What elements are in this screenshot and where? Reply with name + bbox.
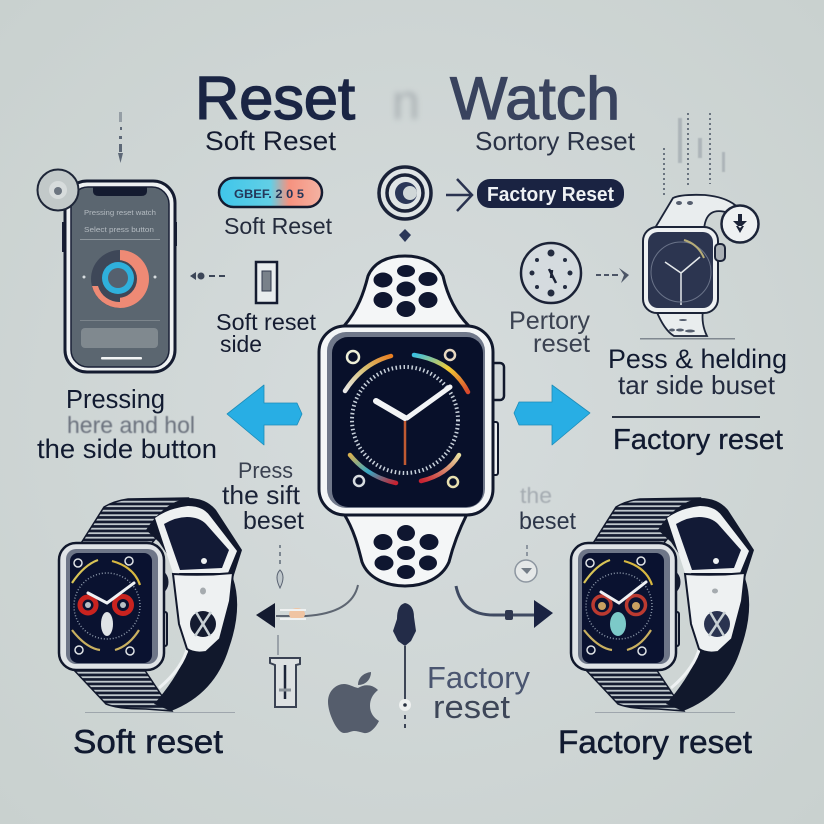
- label: the beset: beset: [519, 508, 576, 535]
- small watch: [643, 195, 735, 336]
- center watch case: [319, 326, 493, 515]
- center watch colored arcs: [345, 355, 468, 483]
- title: n: [392, 74, 420, 130]
- small watch case: [643, 227, 718, 313]
- dashed arrow: clock to watch: [596, 268, 629, 283]
- subtitle: factory reset: Sortory Reset: [475, 126, 636, 156]
- center oval: [101, 612, 113, 636]
- phone screen text: Select press button: [84, 227, 154, 234]
- strap outer: [146, 498, 242, 711]
- bottom right watch: [571, 498, 754, 711]
- case: [571, 543, 676, 670]
- strap dark window: [676, 517, 741, 570]
- apple logo: [328, 672, 379, 733]
- soft reset pill: [219, 178, 322, 207]
- label: press the sift beset: [222, 458, 304, 535]
- label: press and holding: tar side buset: [618, 370, 776, 400]
- screen: [70, 553, 152, 663]
- arcs: [584, 560, 652, 650]
- label: the beset: [519, 483, 576, 535]
- bottom left watch: [59, 498, 242, 711]
- label: soft reset: Soft Reset: [224, 213, 333, 239]
- label: factory reset center: [427, 660, 530, 725]
- label: factory reset center: reset: [433, 689, 510, 725]
- side button: [160, 612, 167, 646]
- center watch top band: [344, 256, 469, 326]
- small pin icon left: [277, 545, 283, 588]
- label: factory reset right: Factory reset: [613, 424, 783, 456]
- phone ring chart: [82, 250, 156, 308]
- phone screen text: [84, 210, 156, 234]
- arrow left cyan: [227, 385, 302, 445]
- center watch side button: [491, 422, 498, 475]
- arrow right cyan: [514, 385, 590, 445]
- pin icon center: [393, 603, 416, 700]
- small watch bands: [655, 195, 735, 232]
- strap outer: [658, 498, 754, 711]
- title: Reset: [195, 65, 355, 132]
- case: [59, 543, 164, 670]
- tick ring: [586, 573, 652, 639]
- label: pressing left: here and hol: [67, 412, 195, 438]
- label: the beset: the: [520, 483, 552, 508]
- tick ring: [74, 573, 140, 639]
- small dial icon right: [515, 545, 537, 582]
- side button icon: [256, 262, 277, 303]
- strap dark window: [164, 517, 229, 570]
- clasp: [173, 573, 233, 653]
- red rings: [80, 596, 132, 614]
- label: soft reset side: side: [220, 331, 262, 357]
- phone notch: [93, 187, 147, 196]
- curved arrow right: [456, 586, 553, 628]
- shadow line under small watch: [640, 338, 735, 340]
- arrow to factory reset: [446, 179, 472, 211]
- zoom circle on phone: [38, 170, 78, 210]
- phone: [62, 181, 177, 372]
- strap white loop: [667, 506, 749, 573]
- title: Watch: [450, 65, 620, 132]
- label: press the sift beset: Press: [238, 458, 293, 483]
- small watch crown: [715, 244, 725, 261]
- shadow line right: [595, 712, 735, 713]
- hands: [601, 582, 646, 603]
- caption: factory reset: Factory reset: [558, 724, 752, 760]
- center small dot: [399, 699, 411, 728]
- label: factory reset clock: Pertory: [509, 307, 590, 335]
- dot marker: [399, 229, 411, 242]
- strap mesh: [584, 498, 700, 711]
- arcs: [72, 560, 140, 650]
- side button: [672, 612, 679, 646]
- screen: [582, 553, 664, 663]
- factory reset pill: [477, 179, 624, 208]
- hands: [88, 583, 134, 603]
- dashed arrow: phone: [190, 272, 225, 280]
- center watch: [319, 256, 504, 586]
- strap white loop: [155, 506, 237, 573]
- strap mesh: [72, 498, 188, 711]
- center watch bottom band: [344, 514, 467, 586]
- label: soft reset side: Soft reset: [216, 309, 316, 335]
- label: press the sift beset: beset: [243, 507, 304, 535]
- clasp: [685, 573, 745, 653]
- crown: [662, 569, 682, 595]
- curved arrow left: [256, 585, 358, 628]
- small watch badge: [722, 206, 758, 242]
- label: factory reset clock: reset: [533, 330, 590, 358]
- shadow line left: [85, 712, 235, 713]
- clasp disk: [190, 611, 216, 637]
- caption: soft reset: Soft reset: [73, 723, 223, 760]
- label: pressing left: the side button: [37, 434, 217, 464]
- red rings: [593, 596, 646, 614]
- label: press the sift beset: the sift: [222, 480, 301, 510]
- center oval: [610, 612, 626, 636]
- label: press and holding: Pess & helding: [608, 344, 787, 374]
- phone button: [81, 328, 158, 348]
- center watch screen: [332, 337, 483, 507]
- label: pressing left: [37, 386, 217, 464]
- clock icon: [521, 243, 581, 303]
- dotted arrow: top left: [118, 112, 123, 163]
- small tool icon bottom left: [270, 635, 300, 707]
- center watch hands: [404, 417, 406, 465]
- label: press and holding: [608, 344, 787, 400]
- strap white edge: [671, 646, 700, 688]
- clasp disk: [704, 611, 730, 637]
- center watch crown: [491, 363, 504, 400]
- title: [195, 65, 620, 132]
- center watch tick ring: [352, 367, 458, 473]
- center watch complications: [347, 350, 458, 487]
- crown: [150, 569, 170, 595]
- soft reset pill: GBEF. 2 0 5: [234, 187, 304, 201]
- label: factory reset clock: [509, 307, 590, 358]
- dotted lines: top right: [664, 113, 725, 195]
- label: factory reset center: Factory: [427, 660, 530, 695]
- label: pressing left: Pressing: [66, 386, 165, 414]
- target icon: [379, 167, 431, 219]
- strap white edge: [159, 646, 188, 688]
- subtitle: soft reset: Soft Reset: [205, 126, 337, 156]
- small watch hands: [665, 257, 700, 305]
- label: soft reset side: [216, 309, 316, 357]
- factory reset pill: Factory Reset: [487, 184, 614, 206]
- phone screen text: Pressing reset watch: [84, 210, 156, 217]
